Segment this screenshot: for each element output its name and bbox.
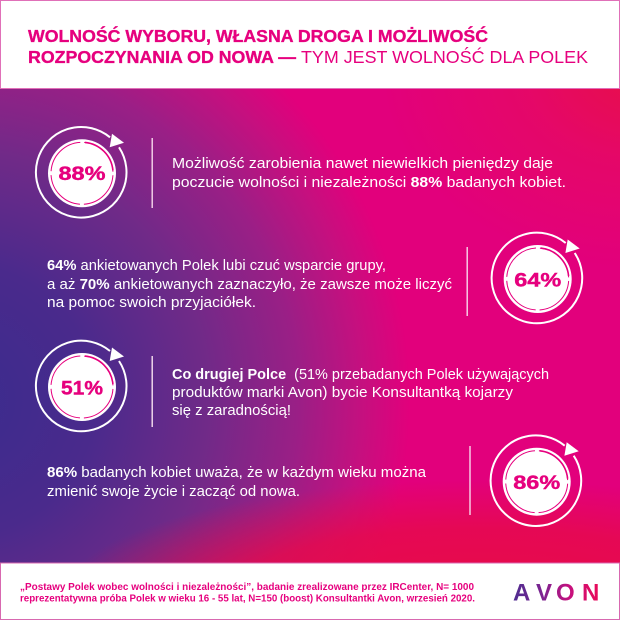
circle badge 88% bbox=[36, 127, 127, 218]
logo: AVON: AVON bbox=[513, 580, 599, 606]
divider bbox=[469, 446, 471, 515]
text block 1 bbox=[172, 155, 566, 191]
title: TYM JEST WOLNOŚĆ DLA POLEK bbox=[301, 46, 588, 67]
text block 2 bbox=[47, 257, 452, 311]
circle badge 86%: 86% bbox=[513, 473, 560, 494]
text block 4: zmienić swoje życie i zacząć od nowa. bbox=[47, 483, 300, 500]
stat row 3: 51% bbox=[36, 341, 549, 431]
header panel bbox=[0, 0, 620, 88]
source note bbox=[20, 582, 475, 604]
circle badge 51% bbox=[36, 341, 127, 431]
divider bbox=[466, 247, 468, 316]
divider bbox=[152, 138, 153, 208]
text block 3: produktów marki Avon) bycie Konsultantką kojarzy bbox=[172, 384, 513, 401]
text block 4 bbox=[47, 464, 427, 500]
title: WOLNOŚĆ WYBORU, WŁASNA DROGA I MOŻLIWOŚĆ bbox=[28, 25, 488, 46]
source note: „Postawy Polek wobec wolności i niezależności”, badanie zrealizowane przez IRCenter, N= 1000 bbox=[20, 582, 475, 593]
title bbox=[28, 25, 588, 67]
footer panel bbox=[0, 563, 620, 620]
circle badge 51%: 51% bbox=[61, 378, 103, 400]
circle badge 64%: 64% bbox=[514, 270, 561, 292]
source note: reprezentatywna próba Polek w wieku 16 - 55 lat, N=150 (boost) Konsultantki Avon, wrzesień 2020. bbox=[20, 594, 475, 604]
stat row 4: 86% bbox=[47, 435, 581, 526]
text block 1: Możliwość zarobienia nawet niewielkich pieniędzy daje bbox=[172, 155, 553, 172]
divider bbox=[152, 356, 153, 427]
text block 3 bbox=[172, 366, 549, 419]
title: ROZPOCZYNANIA OD NOWA — bbox=[28, 47, 296, 67]
text block 2: a aż 70% ankietowanych zaznaczyło, że zawsze może liczyć bbox=[47, 276, 452, 293]
circle badge 88%: 88% bbox=[58, 164, 106, 185]
text block 1: poczucie wolności i niezależności 88% badanych kobiet. bbox=[172, 174, 566, 191]
stat row 2: 64% bbox=[47, 233, 582, 323]
text block 2: na pomoc swoich przyjaciółek. bbox=[47, 294, 256, 311]
text block 4: 86% badanych kobiet uważa, że w każdym wieku można bbox=[47, 464, 427, 481]
circle badge 64% bbox=[492, 233, 582, 323]
text block 3: Co drugiej Polce (51% przebadanych Polek używających bbox=[172, 366, 549, 383]
circle badge 86% bbox=[491, 435, 581, 526]
text block 2: 64% ankietowanych Polek lubi czuć wsparcie grupy, bbox=[47, 257, 386, 274]
text block 3: się z zaradnością! bbox=[172, 402, 291, 419]
stat row 1: 88% bbox=[36, 127, 566, 218]
